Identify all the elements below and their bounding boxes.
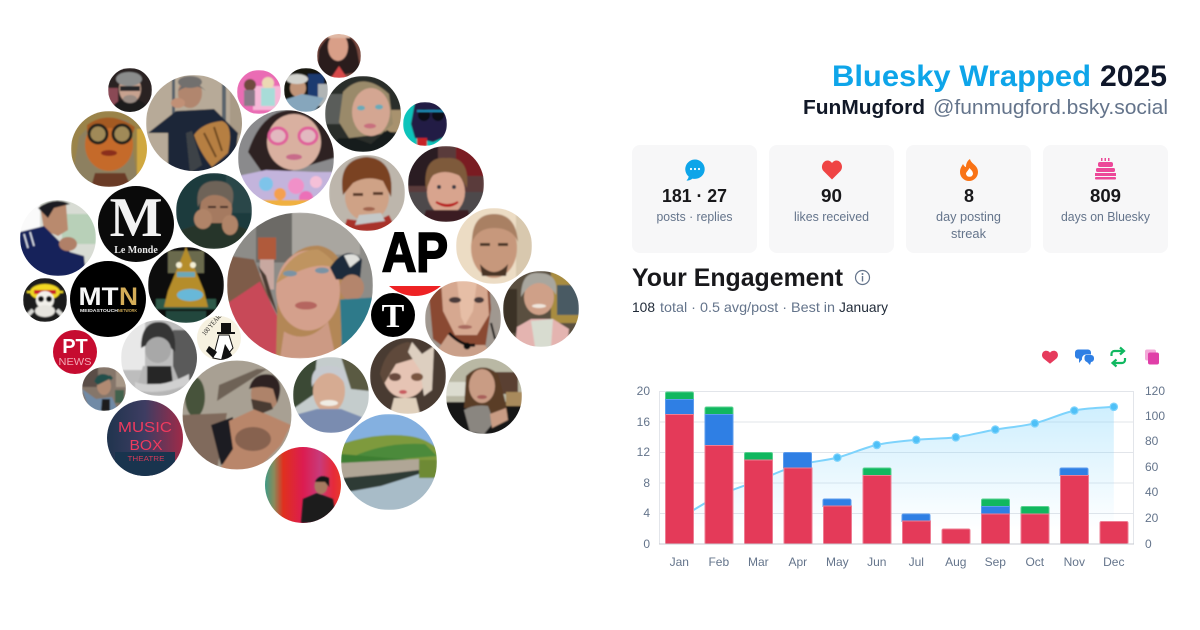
user name and handle: FunMugford <box>803 97 925 119</box>
avatar: woman in top red portrait <box>317 33 361 78</box>
avatar: woman holding cat <box>446 358 522 434</box>
avatar: PT News logo: NEWS <box>58 356 92 368</box>
right axis labels: 120 <box>1145 384 1165 398</box>
avatar: New York Times T logo: T <box>382 298 405 335</box>
avatar: 100 Years monocle illustration: 100 YEARS <box>200 311 225 337</box>
icon: quote squares <box>1145 350 1159 364</box>
left axis labels <box>637 384 650 551</box>
stat card: day posting streak: day posting <box>936 209 1001 224</box>
avatar: pink cartoon characters <box>237 70 281 114</box>
avatar: Music Box Theatre sign: BOX <box>130 437 162 454</box>
left axis labels: 4 <box>643 506 650 520</box>
bars: replies and reposts (top segments) <box>666 392 1088 522</box>
left axis labels: 20 <box>637 384 650 398</box>
stat card: likes received: likes received <box>794 209 869 224</box>
month labels: May <box>826 555 849 569</box>
avatar: woman with choker <box>425 281 501 357</box>
icon: like heart <box>1042 351 1058 364</box>
stat card: day posting streak: 8 <box>964 186 974 206</box>
avatar: woman looking up, large center portrait <box>227 212 373 358</box>
month labels: Nov <box>1064 555 1085 569</box>
avatar: AP logo <box>377 220 453 308</box>
avatar: blonde woman selfie <box>325 76 403 152</box>
title: Bluesky Wrapped <box>832 60 1091 93</box>
chart legend icons <box>1042 348 1159 366</box>
avatar: Le Monde logo: Le Monde <box>114 245 158 256</box>
avatar: MeidasTouch Network logo: NETWORK <box>118 308 137 313</box>
month labels: Sep <box>985 555 1006 569</box>
month labels: Apr <box>788 555 807 569</box>
avatar: doll with ribbon <box>370 338 446 414</box>
icon: flame <box>960 159 978 181</box>
chart: monthly engagement with cumulative line <box>637 384 1165 569</box>
right axis labels: 100 <box>1145 409 1165 423</box>
avatar: red-haired boy <box>329 155 405 231</box>
stat card: days on Bluesky: 809 <box>1090 186 1121 206</box>
icon: heart <box>822 160 842 180</box>
avatar: MeidasTouch Network logo: MT <box>78 283 118 311</box>
stat card: likes received: 90 <box>821 186 842 206</box>
avatar: older woman with grey hair <box>503 271 579 347</box>
user name and handle <box>803 97 1168 119</box>
month labels: Feb <box>708 555 729 569</box>
month labels: Jul <box>909 555 924 569</box>
avatar: PT News logo <box>53 330 97 374</box>
avatar: bald man with goatee <box>456 208 532 284</box>
month labels: Dec <box>1103 555 1124 569</box>
user name and handle: @funmugford.bsky.social <box>933 97 1168 119</box>
avatar: orange painted woman with glasses <box>71 111 149 187</box>
stat card: likes received <box>769 145 894 253</box>
avatar: Le Monde logo <box>98 186 174 262</box>
avatar: woman with pink glasses and colorful top <box>238 110 334 206</box>
avatar: Le Monde logo: M <box>110 187 162 249</box>
cumulative line <box>679 407 1114 519</box>
right axis labels <box>1145 384 1165 551</box>
avatar: man in dark coat holding baguette hand <box>146 75 244 173</box>
right axis labels: 20 <box>1145 511 1159 525</box>
avatar: black and white toddler <box>121 320 199 396</box>
avatar: landscape with boardwalk <box>341 414 437 510</box>
left axis labels: 8 <box>643 476 650 490</box>
right axis labels: 60 <box>1145 460 1159 474</box>
month labels: Jan <box>670 555 689 569</box>
avatar: Music Box Theatre sign: MUSIC <box>118 420 172 436</box>
avatar: MeidasTouch Network logo <box>70 261 146 337</box>
stat card: day posting streak <box>906 145 1031 253</box>
icon: info <box>856 270 870 284</box>
avatar: PT News logo: PT <box>62 336 88 358</box>
stat card: days on Bluesky: days on Bluesky <box>1061 209 1150 224</box>
line points <box>834 403 1118 461</box>
left axis labels: 0 <box>643 537 650 551</box>
stat card: days on Bluesky <box>1043 145 1168 253</box>
avatar: shirtless bearded man <box>182 360 292 470</box>
month labels: Jun <box>867 555 886 569</box>
engagement summary line: January <box>839 299 888 315</box>
avatar: MeidasTouch Network logo: MEIDASTOUCH <box>80 308 118 313</box>
avatar: yellow cartoon figure on throne <box>148 247 224 323</box>
right axis labels: 0 <box>1145 537 1152 551</box>
avatar: New York Times T logo <box>371 293 415 337</box>
bars: likes (bottom segments) <box>666 414 1128 544</box>
avatar: bearded man with hands at face <box>176 173 252 249</box>
right axis labels: 40 <box>1145 485 1159 499</box>
avatar: AP logo: AP <box>382 220 448 284</box>
avatar: One Piece skull flag <box>23 278 67 322</box>
avatar: MeidasTouch Network logo: N <box>119 283 138 311</box>
avatar: cartoon Darth Vader with glasses <box>403 102 447 146</box>
stat card: day posting streak: streak <box>951 226 986 241</box>
month labels: Oct <box>1025 555 1045 569</box>
engagement summary line <box>632 299 888 315</box>
avatar: Music Box Theatre sign <box>107 400 183 476</box>
engagement summary line: total · 0.5 avg/post · Best in <box>660 299 835 315</box>
avatar: Music Box Theatre sign: THEATRE <box>128 454 164 463</box>
icon: repost arrows <box>1112 348 1125 366</box>
stat card: posts and replies <box>632 145 757 253</box>
cumulative area <box>679 407 1114 544</box>
avatar: man taking mirror selfie <box>82 367 128 411</box>
icon: birthday cake <box>1095 158 1116 180</box>
month labels: Aug <box>945 555 966 569</box>
avatar bubble cluster <box>20 33 579 523</box>
engagement summary line: 108 <box>632 299 655 315</box>
icon: speech bubble <box>685 159 705 181</box>
avatar: grey-haired man with glasses <box>108 68 152 112</box>
avatar: George Takei <box>293 357 369 433</box>
avatar: smiling boy in red setting <box>408 146 486 222</box>
title: 2025 <box>1100 60 1167 93</box>
month labels: Mar <box>748 555 769 569</box>
avatar: boy in hat <box>284 68 328 112</box>
heading: Your Engagement: Your Engagement <box>632 264 844 292</box>
left axis labels: 16 <box>637 415 650 429</box>
icon: replies bubbles <box>1075 350 1094 365</box>
avatar: man with adidas jacket <box>20 200 96 276</box>
avatar: 100 Years monocle illustration <box>197 316 241 360</box>
right axis labels: 80 <box>1145 434 1159 448</box>
month labels <box>670 555 1124 569</box>
stat card: posts and replies: 181 · 27 <box>662 186 727 206</box>
avatar: man against red gradient <box>265 447 341 523</box>
stat card: posts and replies: posts · replies <box>656 209 733 224</box>
left axis labels: 12 <box>637 445 650 459</box>
